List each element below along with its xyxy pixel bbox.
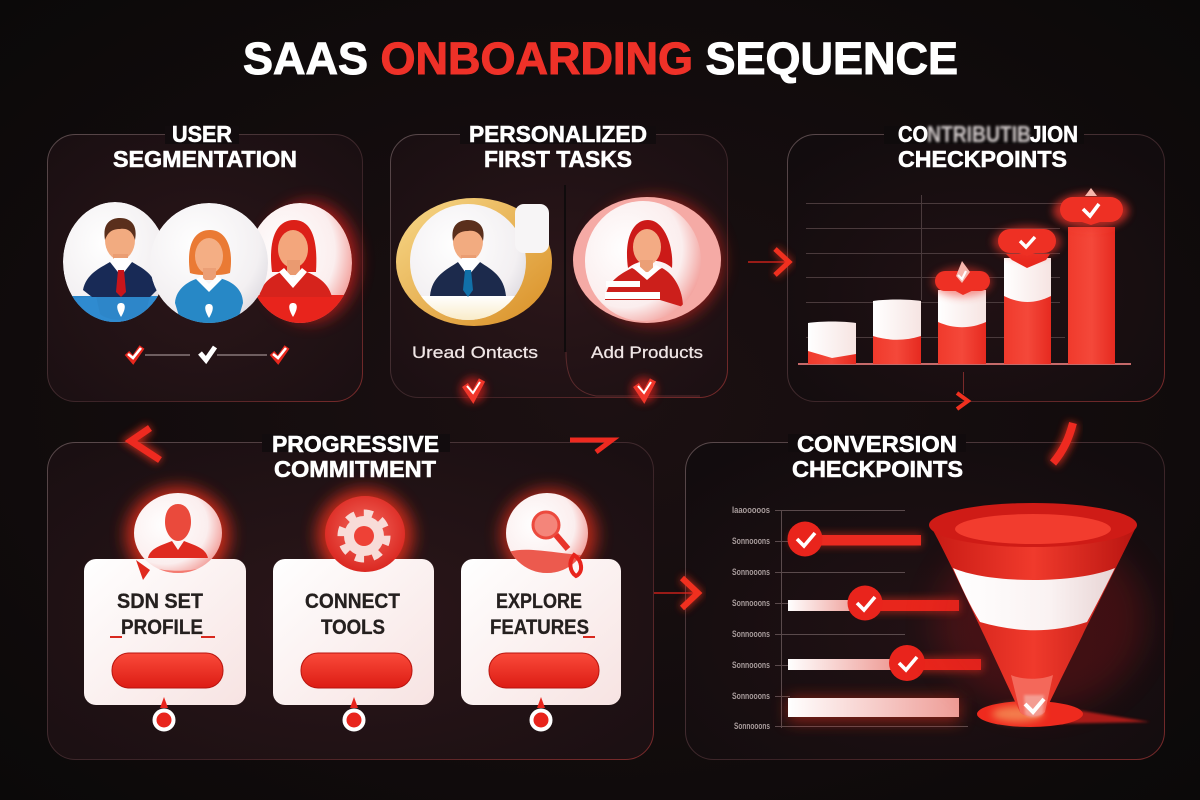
progress bar 1 — [788, 522, 922, 556]
panel: progressive commitment — [48, 431, 654, 760]
pin marker — [344, 697, 364, 730]
heading: conversion checkpoints: CONVERSION — [797, 431, 957, 457]
heading: garbled conversion checkpoints: JION — [1030, 121, 1078, 147]
bar 4 — [993, 226, 1061, 364]
axis and labels: Sonnooons — [732, 691, 770, 701]
panel: user segmentation — [48, 121, 362, 402]
label: connect tools: CONNECT — [305, 590, 400, 613]
glow behind avatars — [262, 202, 358, 322]
bar 2 — [873, 300, 921, 364]
icon: profile sphere — [134, 493, 222, 580]
avatar: blue woman — [150, 203, 268, 326]
check: add products — [631, 377, 657, 403]
axis and labels: Sonnooons — [732, 629, 770, 639]
funnel rim — [929, 503, 1137, 547]
progress bar 2 — [788, 586, 960, 620]
arrow: upper left chevron — [131, 428, 160, 460]
arrow: upper right — [570, 440, 612, 452]
panel: contribution checkpoints chart — [788, 121, 1164, 402]
axis and labels: Sonnooons — [732, 598, 770, 608]
pin marker — [532, 697, 550, 730]
axis and labels: Sonnooons — [732, 567, 770, 577]
axis and labels: Sonnooons — [732, 536, 770, 546]
bar 5 — [1053, 188, 1129, 364]
avatar: pink woman — [573, 197, 723, 325]
task label: create contacts: Uread Ontacts — [412, 343, 538, 362]
heading: garbled conversion checkpoints — [898, 121, 1078, 172]
heading: user segmentation: SEGMENTATION — [113, 146, 297, 172]
button — [301, 653, 412, 688]
avatar: gold man — [396, 198, 552, 326]
avatar: man with laptop — [63, 202, 160, 322]
arrow: step 1 to step 3 — [748, 249, 789, 275]
bar 1 — [808, 322, 856, 364]
bottom glow — [410, 394, 700, 398]
step card: explore features — [461, 489, 621, 730]
icon: magnifier sphere — [505, 493, 590, 576]
heading: garbled conversion checkpoints: NTRIBUTIB — [927, 121, 1031, 147]
task label: add products: Add Products — [591, 343, 703, 362]
heading: progressive commitment: PROGRESSIVE — [272, 431, 439, 457]
progress checks — [127, 347, 287, 360]
axis and labels: Iaaooooos — [732, 505, 770, 515]
label: connect tools: TOOLS — [321, 616, 385, 639]
heading: user segmentation: USER — [172, 121, 232, 147]
avatar: red woman — [257, 203, 352, 323]
progress bar 4 — [788, 698, 960, 722]
button — [489, 653, 599, 688]
axis and labels — [732, 505, 968, 731]
pin marker — [154, 697, 174, 730]
panel: conversion checkpoints — [686, 431, 1164, 760]
icon: white card tab — [515, 204, 549, 253]
step card: connect tools — [273, 489, 434, 730]
heading: personalized first tasks: PERSONALIZED — [469, 121, 647, 147]
arrow: slash connector — [1053, 423, 1073, 463]
label: explore features: EXPLORE — [496, 590, 582, 613]
title: SAAS ONBOARDING SEQUENCE — [243, 33, 958, 84]
panel: personalized first tasks — [390, 121, 728, 403]
axis and labels: Sonnooons — [734, 721, 770, 731]
sub-panel divider — [566, 352, 700, 396]
funnel chart — [929, 503, 1150, 727]
arrow: step 4 to step 5 — [654, 578, 698, 608]
heading: progressive commitment: COMMITMENT — [274, 456, 436, 482]
arrow: chart down — [957, 372, 968, 409]
bar 3 — [932, 261, 992, 364]
funnel check — [1025, 699, 1044, 712]
label: explore features: FEATURES — [490, 616, 589, 639]
check: create contacts — [460, 377, 486, 403]
heading: garbled conversion checkpoints: CHECKPOINTS — [898, 146, 1067, 172]
icon: gear sphere — [325, 496, 405, 572]
axis and labels: Sonnooons — [732, 660, 770, 670]
heading: garbled conversion checkpoints: CO — [898, 121, 928, 147]
baseline glow — [798, 362, 1131, 366]
label: set profile: SDN SET — [117, 590, 203, 613]
funnel white band — [953, 568, 1115, 630]
label: set profile: PROFILE — [121, 616, 203, 639]
bar chart — [798, 188, 1131, 364]
heading: conversion checkpoints: CHECKPOINTS — [792, 456, 963, 482]
heading: personalized first tasks: FIRST TASKS — [484, 146, 632, 172]
button — [112, 653, 223, 688]
progress bar 3 — [788, 645, 983, 681]
step card: set profile — [84, 487, 246, 730]
